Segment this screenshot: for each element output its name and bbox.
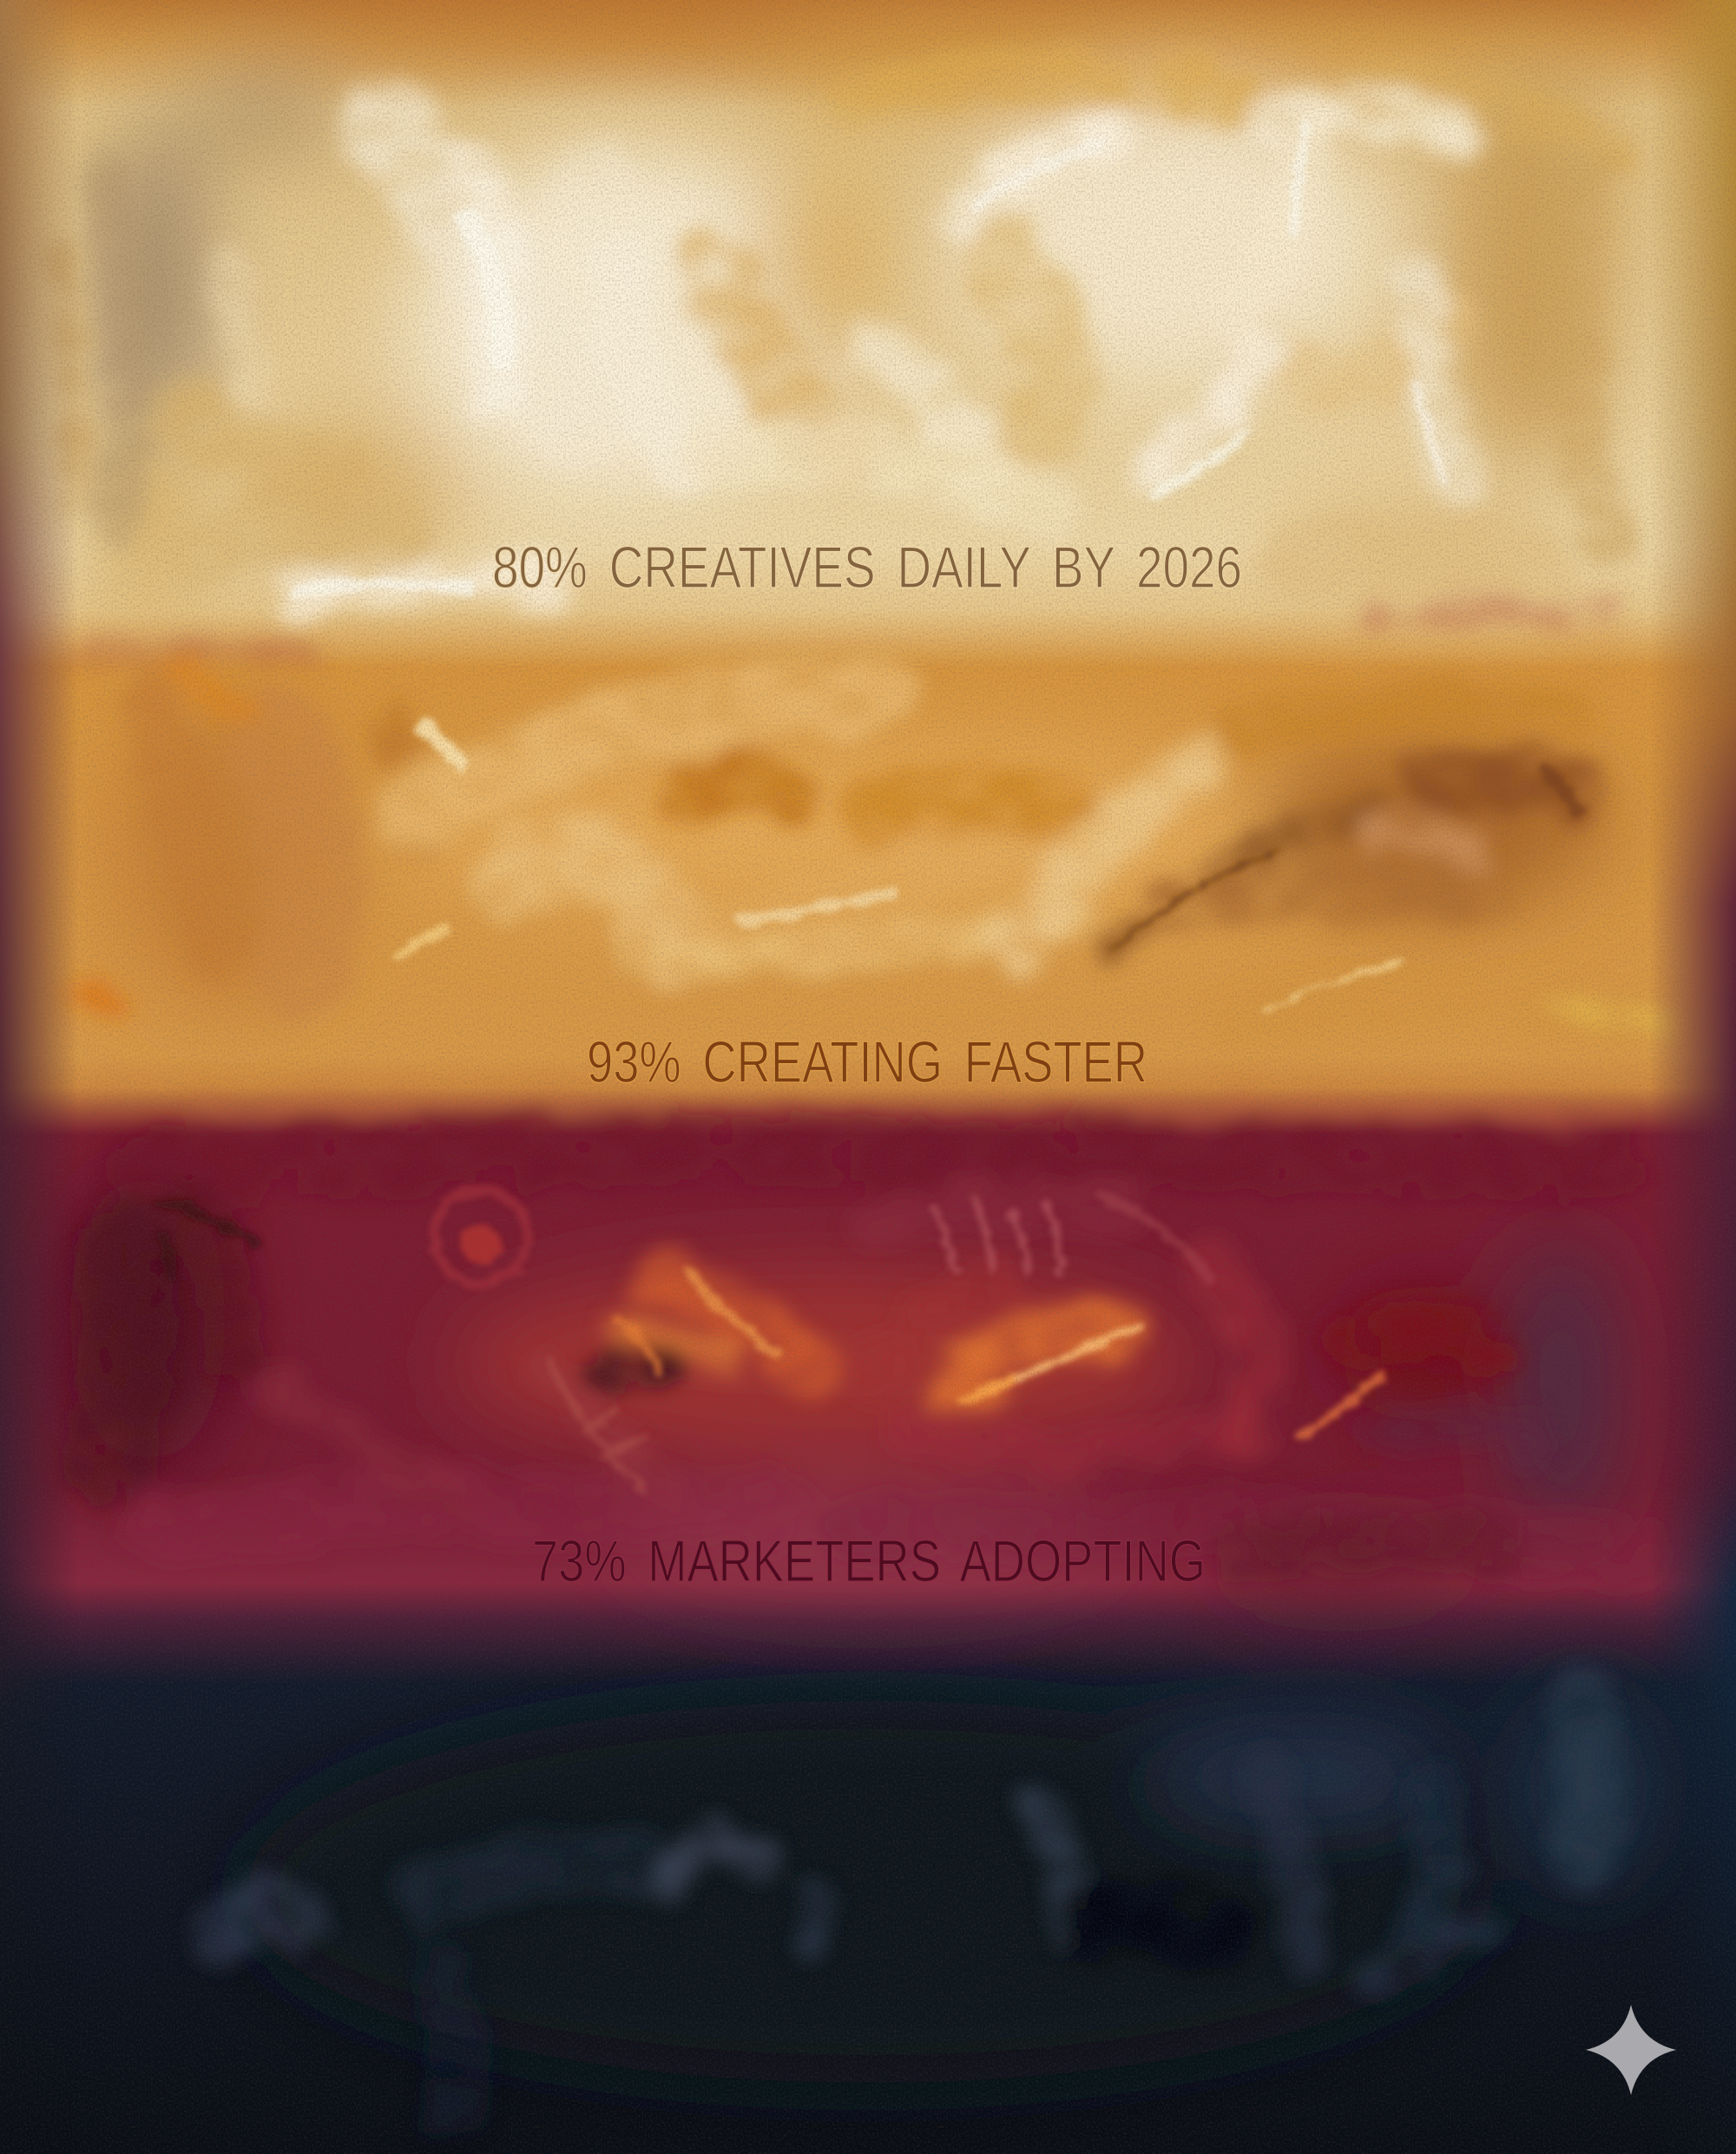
stat label: 73% marketers adopting: 73% MARKETERS ADOPTING [532, 1528, 1206, 1594]
icon: four-point sparkle watermark [1586, 2005, 1676, 2095]
band 2 detail: bright palette-knife highlights [398, 728, 1581, 1010]
stat label: 80% creatives daily by 2026: 80% CREATIVES DAILY BY 2026 [492, 535, 1242, 601]
band 1 detail: thick white highlights [295, 124, 1443, 594]
band 3: crimson field with orange flame strokes [110, 1100, 1635, 1553]
band 4: dark navy brushwork with ghostly strokes [220, 1704, 1591, 2103]
band 3 detail: swirls, ribs and highlights [158, 1190, 1381, 1491]
stat label: 93% creating faster: 93% CREATING FASTER [587, 1029, 1147, 1095]
band 1: cream and white brushwork [62, 76, 1608, 591]
band 2: amber and orange brushwork [69, 612, 1670, 1024]
